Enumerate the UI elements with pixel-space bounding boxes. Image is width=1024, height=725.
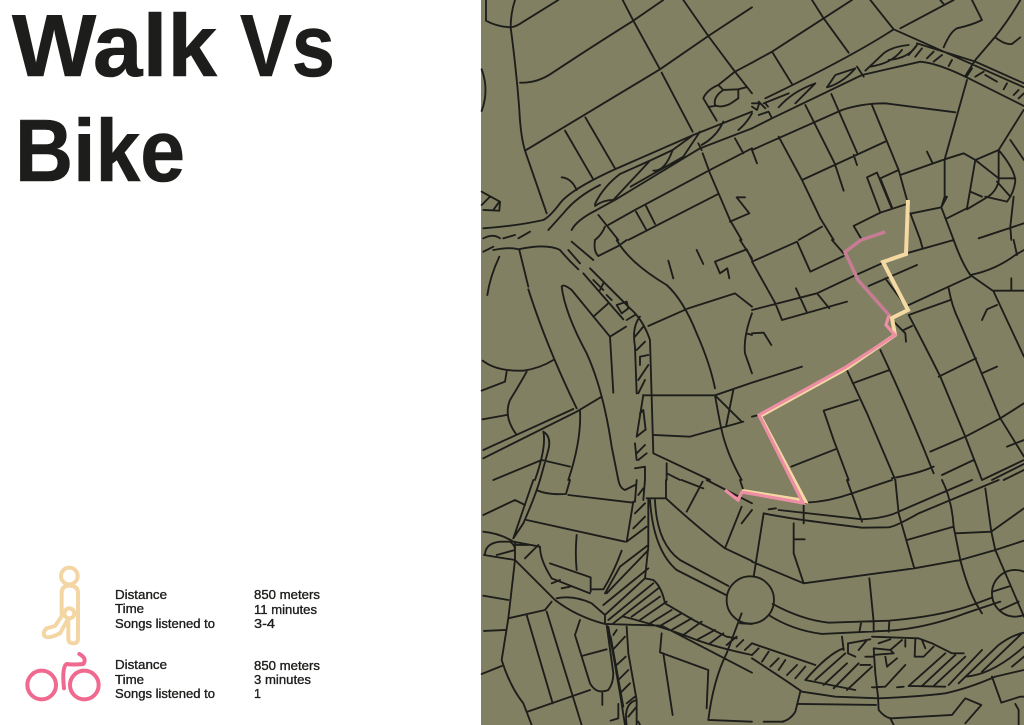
panel: street map: [481, 0, 1024, 725]
bike stats: Songs listened to: [115, 686, 215, 701]
walk stats: 11 minutes: [254, 602, 317, 617]
walk stats: Distance: [115, 587, 167, 602]
bike stats: 3 minutes: [254, 672, 311, 687]
bike stats: Time: [115, 672, 144, 687]
walk stats: Songs listened to: [115, 616, 215, 631]
icon: bicycle: [27, 654, 99, 699]
bike stats: Distance: [115, 657, 167, 672]
bike stats: [115, 657, 320, 701]
map roads: north-east: [752, 0, 1024, 240]
bike stats: 1: [254, 686, 261, 701]
title: Walk Vs Bike: [12, 0, 335, 200]
map roads: west: [482, 240, 752, 480]
cycling route: darker section over the map: [845, 232, 889, 315]
title: Walk Vs Bike: Bike: [15, 101, 185, 200]
icon: walking person: [44, 568, 78, 643]
map roads: centre-east: [752, 240, 1024, 480]
walk stats: 850 meters: [254, 587, 320, 602]
bike stats: 850 meters: [254, 658, 320, 673]
map roads: north-west: [482, 0, 752, 240]
cycling route: [725, 232, 895, 503]
walk stats: 3-4: [254, 616, 275, 631]
map roads and hatched junctions: south-west: [482, 480, 774, 725]
walking route: [742, 200, 908, 501]
walk stats: [115, 587, 320, 631]
walk stats: Time: [115, 601, 144, 616]
map roads and hatched junctions: south-east: [752, 480, 1024, 725]
